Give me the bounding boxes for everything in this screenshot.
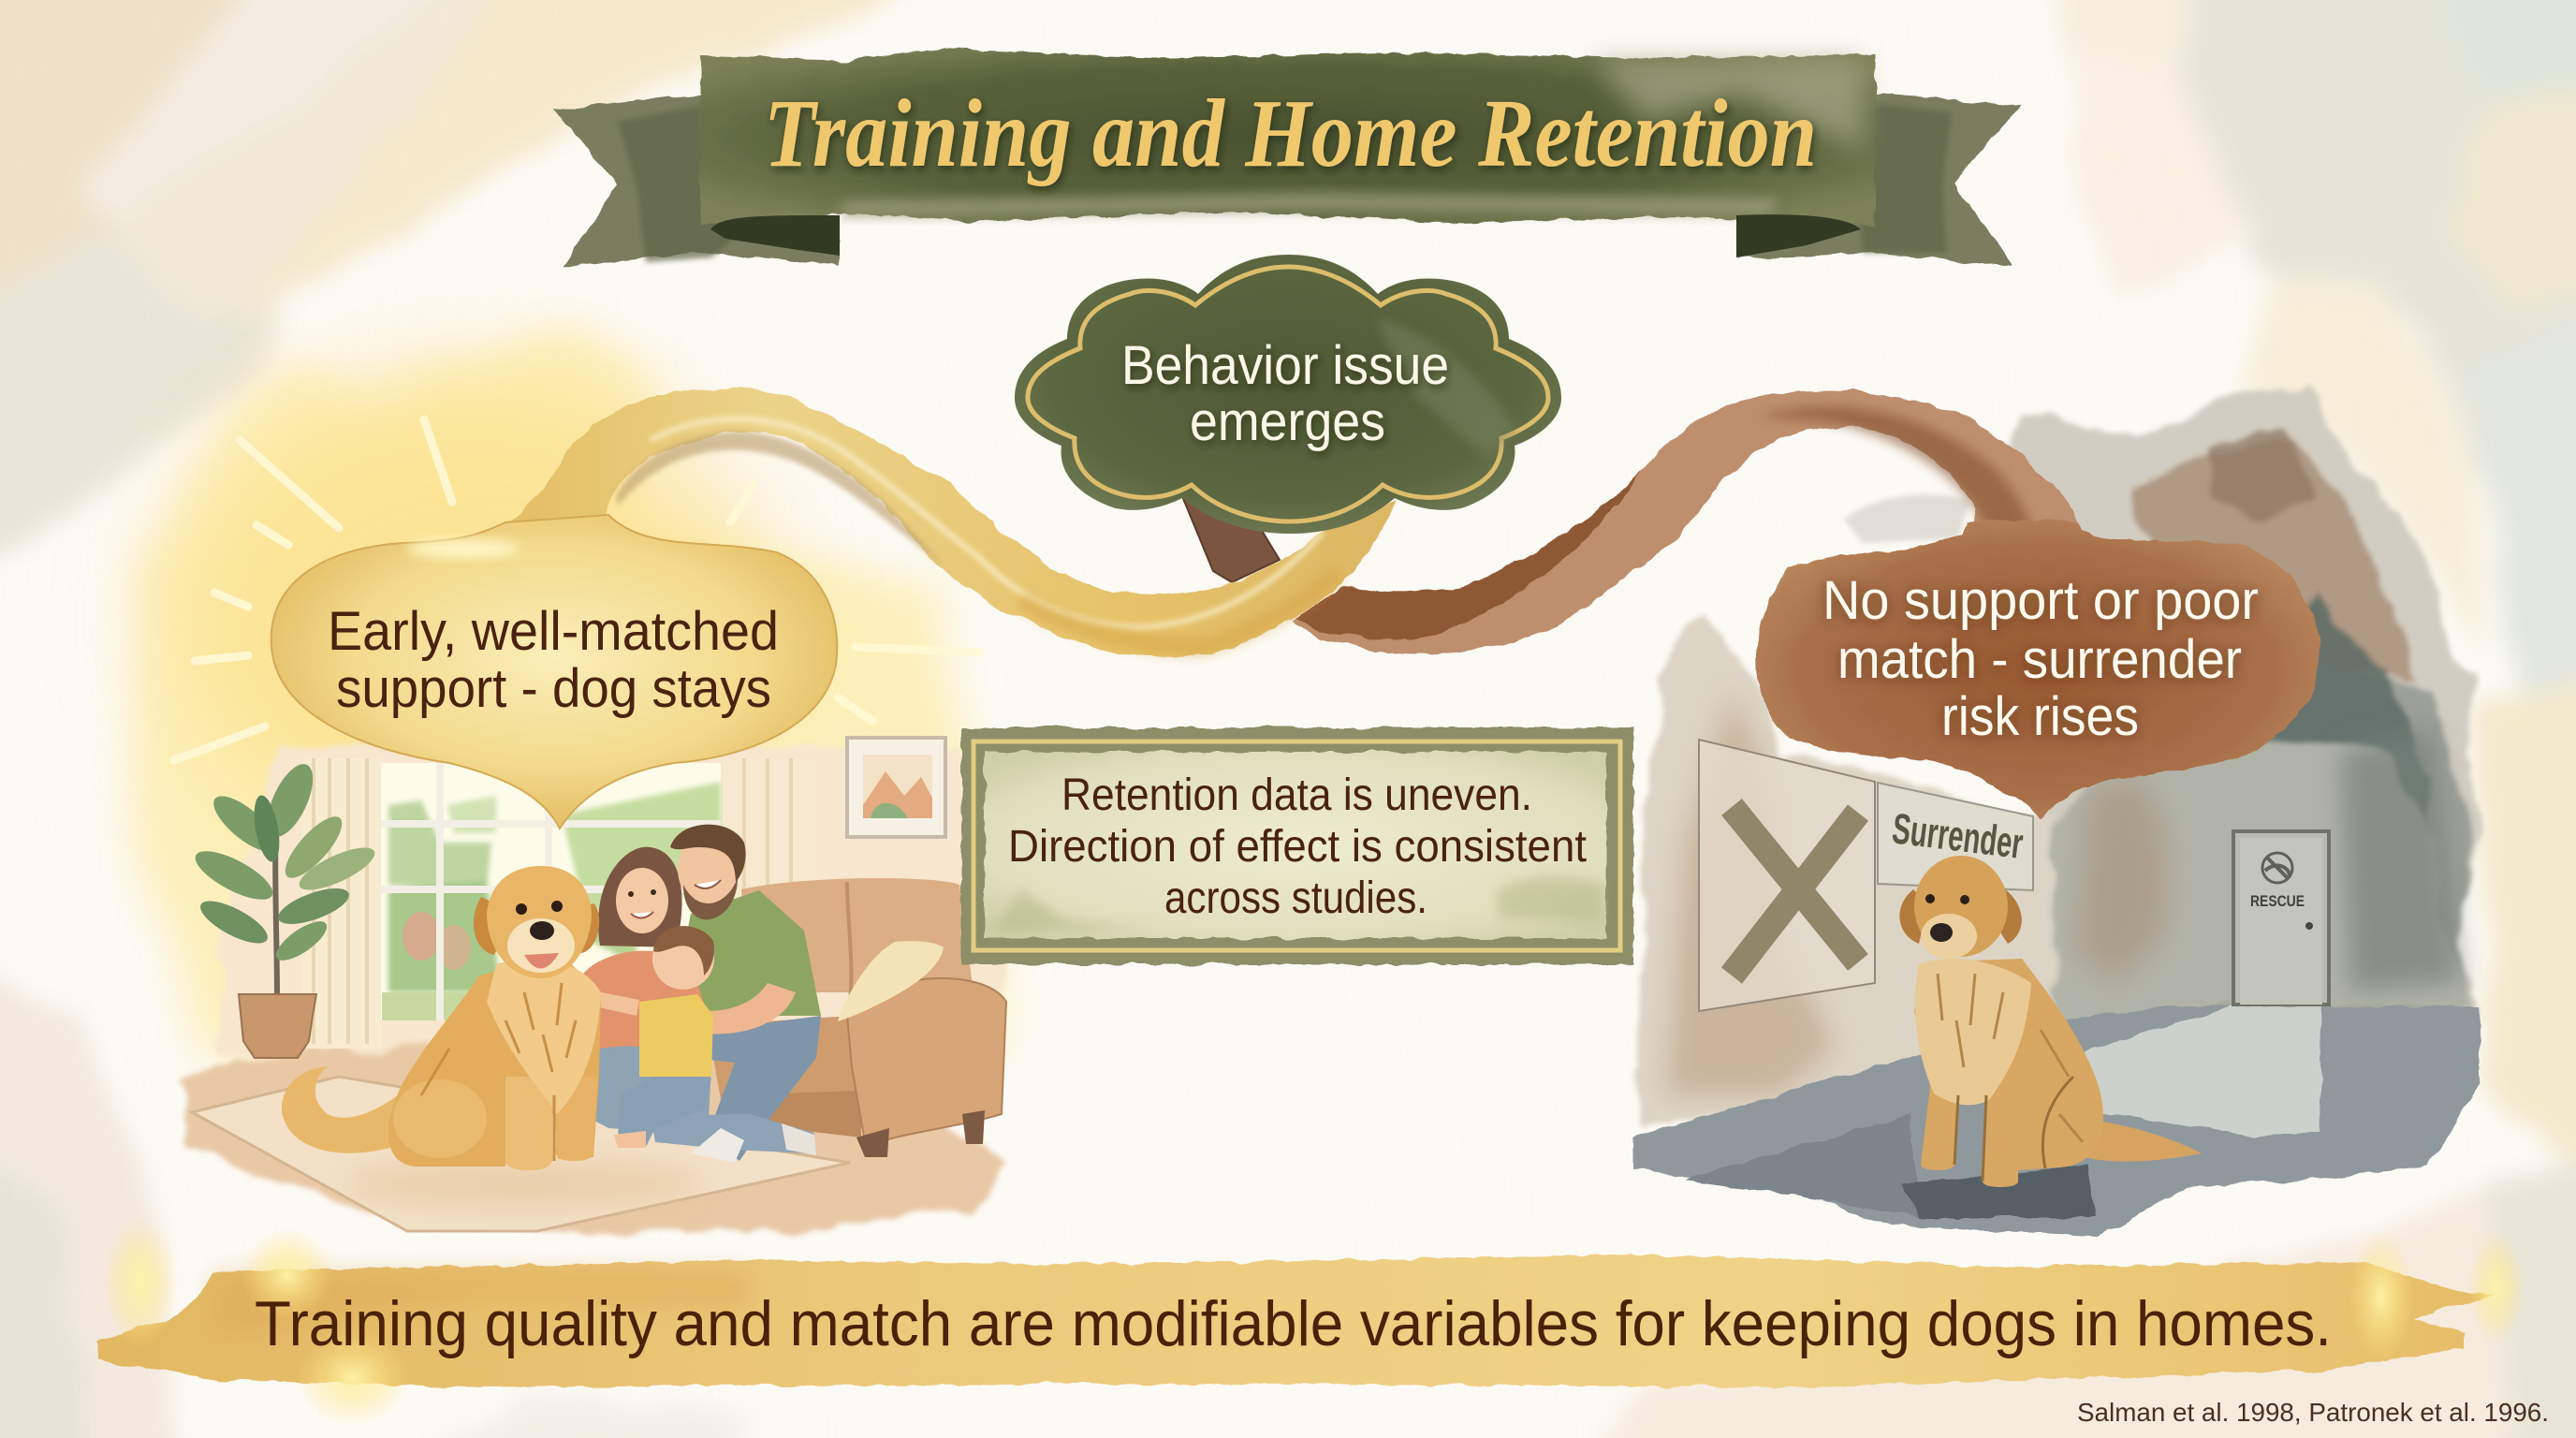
dark smoke wash [1966, 386, 2481, 1020]
golden retriever, happy [282, 866, 601, 1170]
callout text [1008, 770, 1587, 923]
gold path ribbon [496, 388, 1395, 657]
grey smudge above the brown ribbon [1844, 494, 1970, 543]
surrender sign [1878, 783, 2033, 890]
rug [192, 1077, 850, 1231]
dark top of arch [1760, 406, 2033, 534]
panel: surrender scene [1633, 386, 2481, 1237]
outcome text: No support or poor [1822, 570, 2259, 631]
strong yellow core of the glow [168, 374, 768, 861]
framed picture [847, 738, 945, 837]
terracotta pot [239, 994, 316, 1058]
wall stains [2078, 780, 2167, 983]
chest fur [487, 959, 601, 1114]
head [1914, 856, 2008, 957]
floor [178, 1039, 1006, 1236]
tail [282, 1066, 402, 1153]
man [651, 825, 821, 1163]
glints on banner ends [103, 1217, 2525, 1425]
woman [571, 847, 711, 1135]
ears [1899, 889, 1928, 944]
callout: retention data [961, 727, 1633, 964]
glow behind the gold outcome [131, 328, 1006, 1058]
curtains [301, 758, 816, 1049]
ears [474, 897, 513, 955]
sun rays [174, 419, 980, 760]
left wall [1639, 613, 2059, 1133]
surrender sign: Surrender [1890, 803, 2026, 868]
gold main sweep [496, 388, 1395, 657]
boy [582, 926, 714, 1148]
outcome text: risk rises [1941, 686, 2139, 747]
floor [1633, 1006, 2481, 1237]
title: Training and Home Retention [764, 80, 1817, 187]
muzzle [507, 918, 575, 973]
poster with crossed-out X [1699, 740, 1875, 1011]
outcome text [1822, 570, 2259, 747]
cream highlight line [651, 418, 1323, 627]
tan shadow inside the hook [616, 432, 945, 566]
body [388, 955, 601, 1167]
node text: emerges [1190, 391, 1385, 452]
title banner [553, 49, 2022, 267]
card: outcome good [271, 515, 837, 829]
living room wall [215, 749, 1002, 1058]
callout text: across studies. [1164, 873, 1427, 923]
tail [2080, 1119, 2202, 1162]
panel: positive home scene [131, 328, 1006, 1236]
sofa [708, 878, 1006, 1157]
outcome text: support - dog stays [336, 658, 771, 719]
right tail darker layer [1858, 103, 1952, 253]
outcome text: Early, well-matched [328, 601, 779, 662]
darker gold along lower curve [1020, 571, 1339, 647]
right tail [1736, 94, 2022, 267]
brown main sweep [1292, 389, 2087, 653]
body [1914, 959, 2103, 1187]
citation: Salman et al. 1998, Patronek et al. 1996. [2077, 1398, 2549, 1427]
left tail [553, 94, 840, 267]
rescue door [2233, 831, 2329, 1005]
left tail darker layer [618, 103, 739, 262]
chest fur [1915, 959, 2031, 1105]
node text [1121, 335, 1449, 452]
back wall [2050, 740, 2471, 1039]
plant [189, 757, 380, 997]
brown stain on the wall [1666, 693, 1835, 1095]
leg and haunch details [1954, 1077, 2073, 1181]
fur strokes [421, 983, 576, 1161]
golden retriever, sad [1899, 856, 2202, 1187]
right fold [1736, 214, 1861, 257]
haunch [393, 1079, 487, 1158]
ribbon stub under the node [1182, 496, 1280, 582]
window [374, 763, 721, 1020]
head [487, 866, 592, 978]
node: behavior issue [1015, 255, 1561, 534]
conclusion banner [98, 1217, 2525, 1425]
fur strokes [1938, 974, 2083, 1142]
brown path ribbon [1182, 389, 2087, 653]
main ribbon [700, 49, 1875, 225]
conclusion text: Training quality and match are modifiable variables for keeping dogs in homes. [255, 1288, 2332, 1359]
bright highlight at the neck [407, 539, 520, 558]
rescue door: RESCUE [2250, 892, 2305, 910]
outcome text: match - surrender [1837, 629, 2242, 690]
outcome text [328, 601, 779, 719]
front legs [505, 1077, 552, 1170]
card: outcome poor [1756, 521, 2320, 820]
left fold [710, 215, 840, 256]
callout text: Direction of effect is consistent [1008, 822, 1587, 872]
node text: Behavior issue [1121, 335, 1449, 396]
dark inner band [1295, 471, 1643, 639]
callout text: Retention data is uneven. [1061, 770, 1532, 820]
